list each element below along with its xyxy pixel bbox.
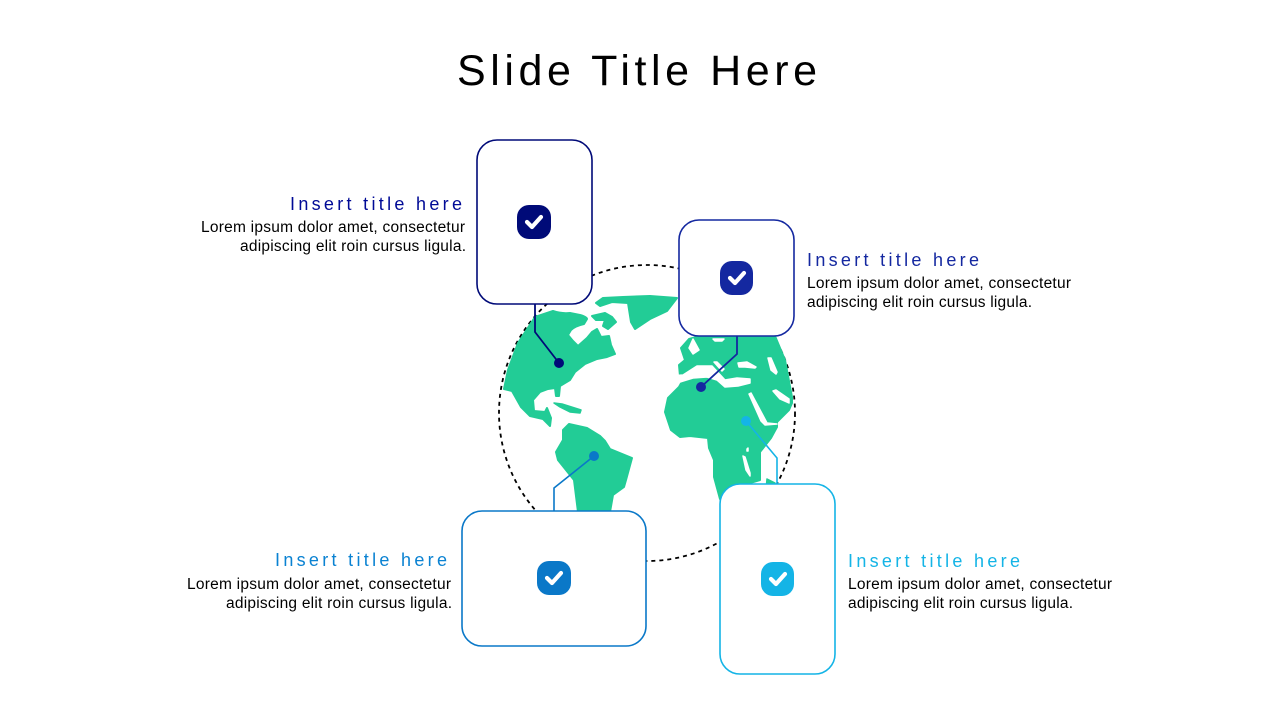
location dot: [554, 358, 564, 368]
map: Africa and Eurasia: [665, 336, 792, 499]
title: Slide Title Here: [457, 47, 817, 95]
text block: top right: Lorem ipsum dolor amet, consectetur: [807, 275, 1071, 292]
icon: checkmark: [517, 205, 551, 239]
card: [462, 511, 646, 646]
callout: bottom left: [462, 451, 646, 646]
map: Arctic islands and Greenland: [596, 296, 677, 329]
text block: bottom left: [187, 550, 452, 612]
connector line: [701, 336, 737, 387]
text block: bottom left: adipiscing elit roin cursus ligula.: [226, 595, 452, 612]
text block: top right: Insert title here: [807, 250, 979, 270]
map: North America: [504, 311, 615, 426]
text block: top left: Lorem ipsum dolor amet, consectetur: [201, 219, 465, 236]
icon: checkmark: [537, 561, 571, 595]
map: South America: [556, 424, 632, 512]
map: Cuba: [554, 403, 581, 413]
connector line: [554, 456, 594, 511]
text block: bottom right: Insert title here: [848, 551, 1020, 571]
text block: top left: [201, 194, 466, 255]
location dot: [741, 416, 751, 426]
text block: bottom right: [848, 551, 1112, 612]
text block: top right: [807, 250, 1071, 311]
callout: bottom right: [720, 416, 835, 674]
text block: bottom left: Insert title here: [275, 550, 447, 570]
text block: top left: Insert title here: [290, 194, 462, 214]
text block: bottom right: Lorem ipsum dolor amet, consectetur: [848, 576, 1112, 593]
connector line: [535, 304, 559, 363]
location dot: [589, 451, 599, 461]
card: [679, 220, 794, 336]
callout: top right: [679, 220, 794, 392]
text block: top right: adipiscing elit roin cursus ligula.: [807, 294, 1032, 311]
card: [720, 484, 835, 674]
connector line: [746, 421, 777, 484]
map: Canadian island: [592, 313, 616, 329]
text block: bottom left: Lorem ipsum dolor amet, consectetur: [187, 576, 451, 593]
map: seas and lakes: [668, 339, 789, 476]
text block: top left: adipiscing elit roin cursus ligula.: [240, 238, 466, 255]
text block: bottom right: adipiscing elit roin cursus ligula.: [848, 595, 1073, 612]
icon: checkmark: [720, 261, 753, 295]
card: [477, 140, 592, 304]
dashed globe outline: [499, 265, 795, 561]
location dot: [696, 382, 706, 392]
map: Madagascar: [766, 479, 776, 490]
callout: top left: [477, 140, 592, 368]
world map: [504, 296, 792, 512]
icon: checkmark: [761, 562, 794, 596]
